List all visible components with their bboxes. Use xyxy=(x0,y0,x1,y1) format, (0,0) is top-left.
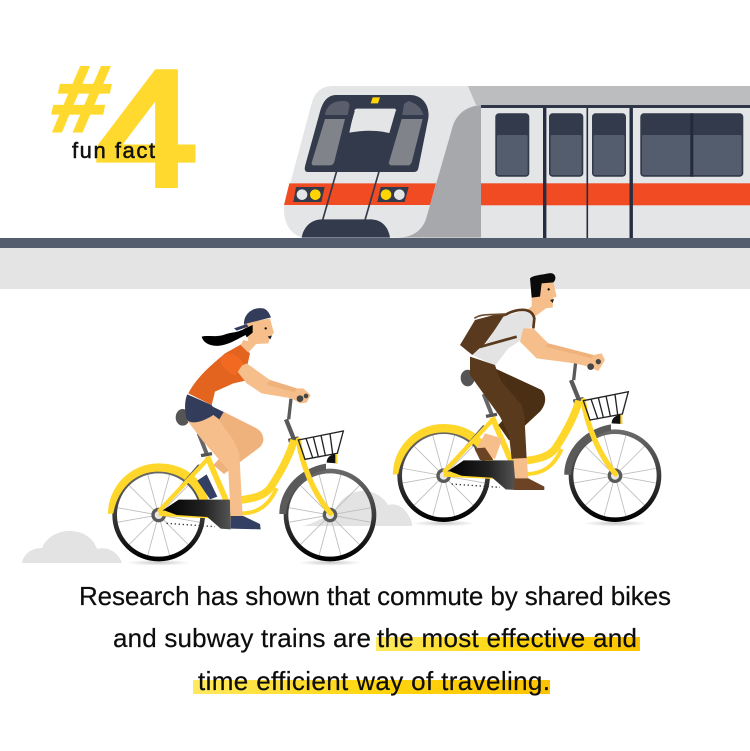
heading: #4 fun fact xyxy=(46,37,197,219)
body text: time efficient way of traveling. xyxy=(198,666,550,696)
cloud behind bike xyxy=(303,491,412,526)
highlight marks xyxy=(193,637,640,694)
rail track xyxy=(0,238,750,248)
train carriage xyxy=(481,105,750,238)
man rider xyxy=(460,273,605,490)
fun fact label: fun fact xyxy=(72,138,155,163)
hash sign: # xyxy=(46,50,117,150)
woman rider xyxy=(185,308,311,529)
train roof xyxy=(468,86,750,105)
cyclist: woman xyxy=(108,308,374,566)
train front cab xyxy=(284,86,481,238)
numeral 4: 4 xyxy=(96,37,197,219)
clouds xyxy=(22,491,412,563)
bike: man's xyxy=(393,356,659,526)
subway train xyxy=(284,86,750,238)
body text: Research has shown that commute by shared bikes xyxy=(79,581,671,611)
body text xyxy=(79,581,671,696)
body text: and subway trains are xyxy=(113,623,371,653)
platform xyxy=(0,248,750,289)
body text: the most effective and xyxy=(377,623,637,653)
bike: woman's xyxy=(108,395,374,566)
cyclist: man xyxy=(393,273,659,526)
cloud left xyxy=(22,531,122,563)
